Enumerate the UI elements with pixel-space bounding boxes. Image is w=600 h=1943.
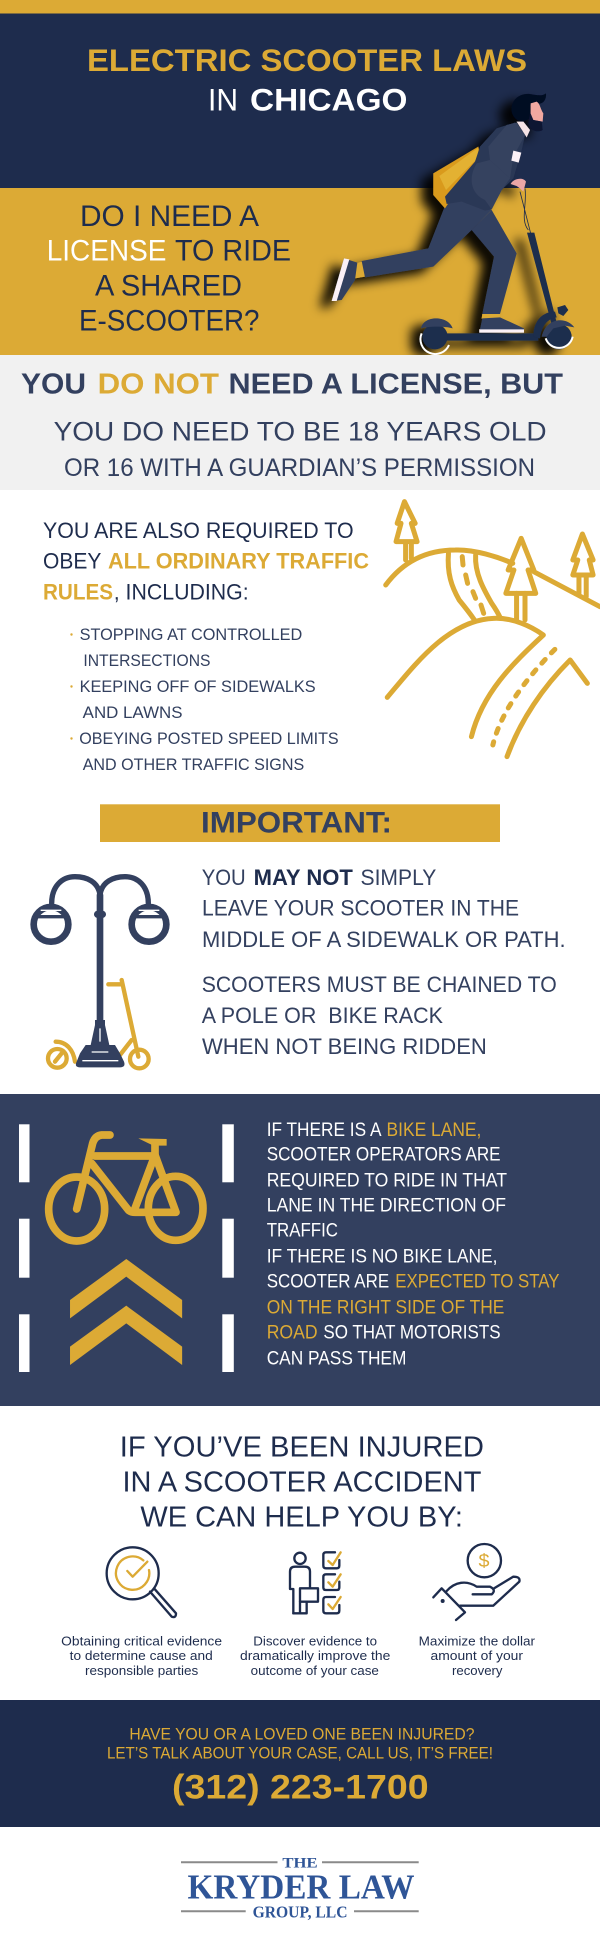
- age requirement: OR 16 WITH A GUARDIAN’S PERMISSION: [64, 454, 535, 482]
- banner: [100, 804, 500, 842]
- icon: street lamp with scooter: [34, 877, 166, 1068]
- age requirement: [54, 417, 547, 482]
- bullet list: AND LAWNS: [83, 704, 182, 722]
- text: bike lane rules: SO THAT MOTORISTS: [323, 1322, 501, 1344]
- icon: person with checklist: [290, 1552, 341, 1613]
- text: bike lane rules: REQUIRED TO RIDE IN THAT: [267, 1170, 507, 1192]
- question heading: TO RIDE: [175, 235, 291, 268]
- bullet list: [70, 626, 339, 774]
- lane markings: [19, 1124, 234, 1372]
- question heading: A SHARED: [95, 270, 242, 303]
- call to action text: LET’S TALK ABOUT YOUR CASE, CALL US, IT’S FREE!: [107, 1743, 493, 1762]
- text: bike lane rules: TRAFFIC: [267, 1220, 338, 1242]
- caption: evidence: responsible parties: [85, 1663, 199, 1678]
- icon: hand holding dollar coin: [433, 1544, 520, 1620]
- intro text: [43, 518, 369, 604]
- intro text: YOU ARE ALSO REQUIRED TO: [43, 518, 354, 543]
- title: ELECTRIC SCOOTER LAWS: [87, 42, 527, 78]
- logo: The Kryder Law Group: [181, 1856, 419, 1922]
- text: chain scooter: [202, 972, 557, 1059]
- text: bike lane rules: ON THE RIGHT SIDE OF THE: [267, 1297, 504, 1319]
- text: may not leave scooter: [202, 865, 566, 952]
- text: chain scooter: WHEN NOT BEING RIDDEN: [202, 1034, 487, 1059]
- text: bike lane rules: IF THERE IS NO BIKE LANE,: [267, 1246, 498, 1268]
- caption: maximize: [419, 1634, 536, 1678]
- text: bike lane rules: ROAD: [267, 1322, 318, 1344]
- heading: you do not need a license: DO NOT: [98, 368, 219, 400]
- text: may not leave scooter: YOU: [202, 865, 246, 890]
- bullet list: STOPPING AT CONTROLLED: [80, 626, 302, 644]
- title: [87, 42, 527, 118]
- caption: evidence: to determine cause and: [70, 1648, 213, 1663]
- text: chain scooter: SCOOTERS MUST BE CHAINED TO: [202, 972, 557, 997]
- caption: discover: dramatically improve the: [240, 1648, 390, 1663]
- question heading: LICENSE: [47, 235, 167, 268]
- text: bike lane rules: CAN PASS THEM: [267, 1348, 406, 1370]
- text: bike lane rules: SCOOTER OPERATORS ARE: [267, 1144, 501, 1166]
- panel: call to action: [0, 1700, 600, 1827]
- panel: header: [0, 0, 600, 355]
- logo: The Kryder Law Group: THE: [282, 1856, 318, 1872]
- caption: evidence: Obtaining critical evidence: [61, 1634, 222, 1649]
- question heading: E-SCOOTER?: [79, 305, 260, 338]
- phone number: (312) 223-1700: [172, 1768, 429, 1806]
- bullet list: INTERSECTIONS: [83, 652, 210, 670]
- caption: maximize: Maximize the dollar: [419, 1634, 536, 1649]
- text: bike lane rules: EXPECTED TO STAY: [395, 1271, 560, 1293]
- text: bike lane rules: [267, 1119, 560, 1370]
- caption: maximize: recovery: [452, 1663, 503, 1678]
- text: chain scooter: A POLE OR BIKE RACK: [202, 1003, 443, 1028]
- bullet list: KEEPING OFF OF SIDEWALKS: [80, 678, 316, 696]
- text: bike lane rules: SCOOTER ARE: [267, 1271, 389, 1293]
- bullet list: OBEYING POSTED SPEED LIMITS: [79, 730, 339, 748]
- intro text: ALL ORDINARY TRAFFIC: [108, 549, 369, 574]
- dollar sign: $: [478, 1551, 490, 1571]
- question heading: DO I NEED A: [80, 200, 259, 233]
- icon: bicycle: [49, 1135, 203, 1241]
- text: may not leave scooter: MAY NOT: [254, 865, 353, 890]
- caption: discover: Discover evidence to: [253, 1634, 377, 1649]
- heading: [120, 1432, 484, 1534]
- heading: you do not need a license: NEED A LICENSE, BUT: [228, 368, 563, 400]
- text: bike lane rules: LANE IN THE DIRECTION OF: [267, 1195, 506, 1217]
- text: bike lane rules: BIKE LANE,: [386, 1119, 481, 1141]
- caption: maximize: amount of your: [430, 1648, 524, 1663]
- intro text: OBEY: [43, 549, 102, 574]
- age requirement: YOU DO NEED TO BE 18 YEARS OLD: [54, 417, 547, 447]
- icon: winding road and trees: [386, 502, 600, 757]
- bullet list: AND OTHER TRAFFIC SIGNS: [83, 756, 304, 774]
- text: bike lane rules: IF THERE IS A: [267, 1119, 382, 1141]
- panel: how we can help: [61, 1432, 536, 1678]
- caption: discover: [240, 1634, 390, 1678]
- banner: IMPORTANT:: [201, 807, 392, 840]
- intro text: , INCLUDING:: [114, 579, 249, 604]
- panel: traffic rules: [43, 502, 600, 774]
- call to action text: [107, 1724, 493, 1762]
- heading: you do not need a license: YOU: [21, 368, 86, 400]
- heading: IN A SCOOTER ACCIDENT: [122, 1467, 482, 1499]
- question heading: [47, 200, 291, 338]
- heading: IF YOU’VE BEEN INJURED: [120, 1432, 484, 1464]
- caption: discover: outcome of your case: [251, 1663, 379, 1678]
- title: IN: [208, 82, 238, 118]
- heading: WE CAN HELP YOU BY:: [140, 1502, 463, 1534]
- panel: important: [34, 804, 566, 1068]
- title: CHICAGO: [250, 82, 408, 118]
- panel: bike lane: [0, 1094, 600, 1406]
- icon: magnifying glass: [107, 1547, 176, 1617]
- intro text: RULES: [43, 579, 113, 604]
- call to action text: HAVE YOU OR A LOVED ONE BEEN INJURED?: [129, 1724, 474, 1743]
- panel: license answer: [0, 355, 600, 490]
- illustration: man riding scooter: [332, 93, 574, 354]
- heading: you do not need a license: [21, 368, 563, 400]
- logo: The Kryder Law Group: KRYDER LAW: [188, 1867, 414, 1906]
- caption: evidence: [61, 1634, 222, 1678]
- icon: chevrons: [70, 1259, 182, 1365]
- text: may not leave scooter: SIMPLY: [360, 865, 437, 890]
- logo: The Kryder Law Group: GROUP, LLC: [253, 1903, 348, 1922]
- text: may not leave scooter: MIDDLE OF A SIDEWALK OR PATH.: [202, 927, 566, 952]
- text: may not leave scooter: LEAVE YOUR SCOOTER IN THE: [202, 896, 519, 921]
